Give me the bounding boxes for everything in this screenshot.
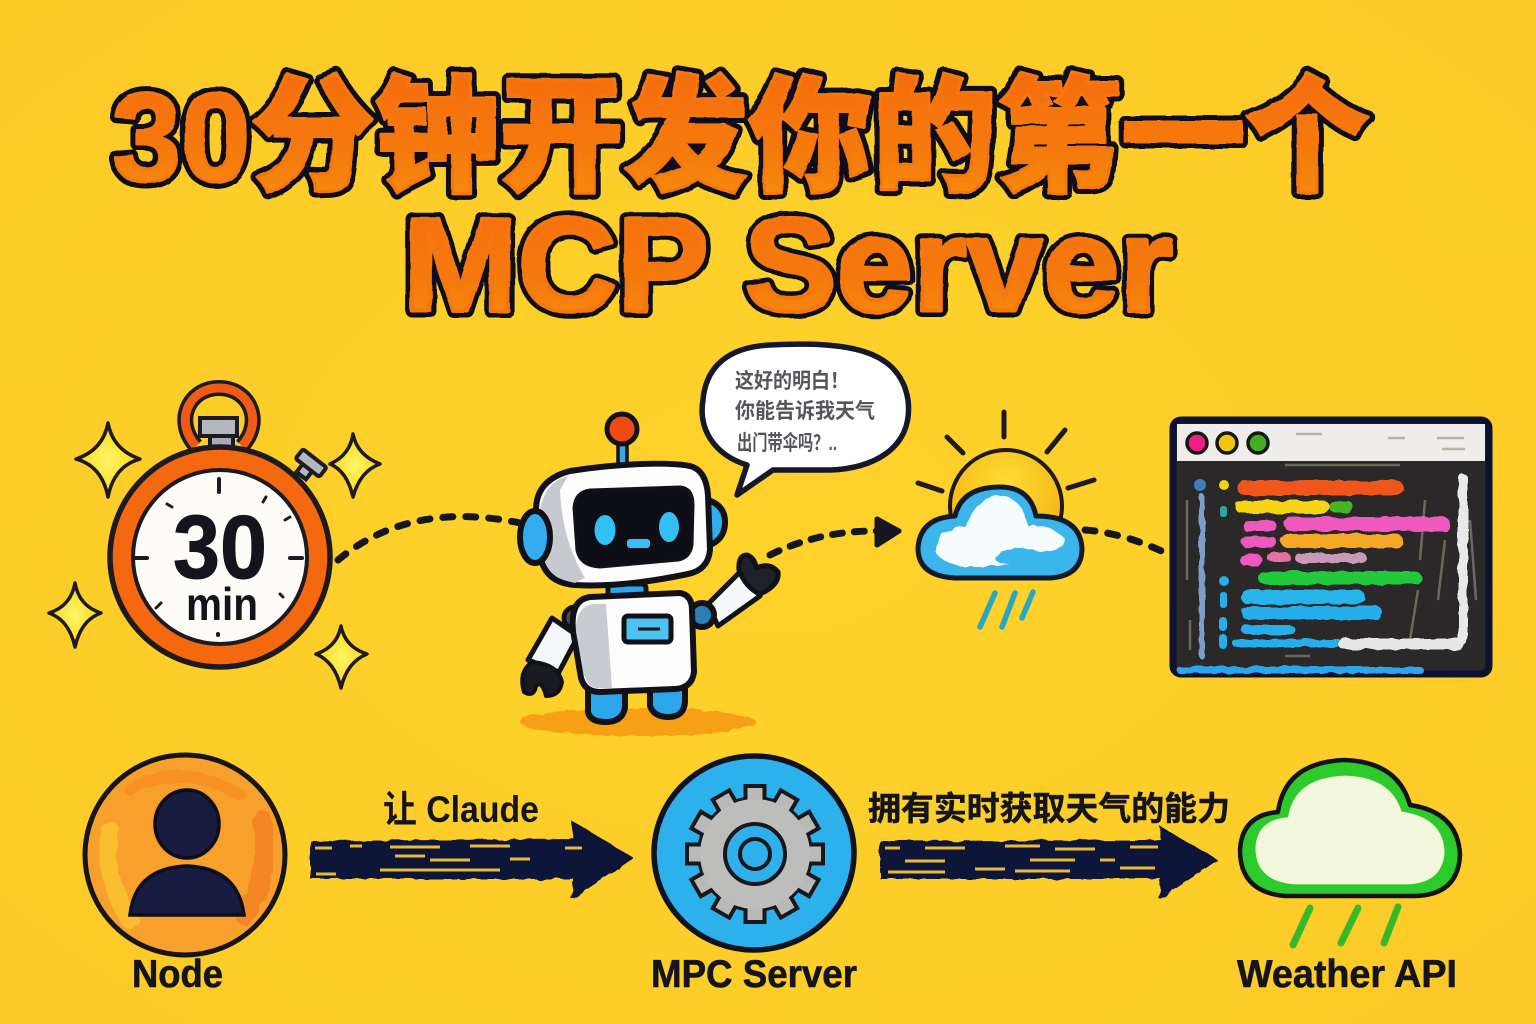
robot shadow	[520, 708, 756, 736]
node circle	[85, 755, 285, 996]
green rain	[1293, 907, 1398, 945]
robot antenna	[607, 414, 637, 466]
stopwatch unit: min	[186, 578, 258, 630]
chalk streaks	[1187, 465, 1476, 656]
node background	[85, 755, 285, 955]
robot right ear	[708, 500, 725, 546]
dashed arrow: robot to weather	[770, 519, 899, 555]
title bar	[1177, 424, 1485, 461]
api label: Weather API	[1237, 953, 1457, 996]
arrow 1	[311, 789, 632, 898]
mcp server circle	[651, 756, 857, 996]
code lines	[1180, 478, 1463, 670]
bubble text	[735, 370, 875, 455]
speech bubble	[702, 344, 909, 495]
arrow 2 streaks	[885, 846, 1158, 872]
title line 2: MCP Server	[403, 191, 1173, 340]
robot head	[536, 464, 710, 585]
robot neck	[608, 584, 646, 598]
arrow 2 shape	[881, 827, 1216, 898]
stopwatch number: 30	[173, 498, 267, 598]
cloud	[918, 487, 1082, 578]
stopwatch ticks	[135, 479, 302, 635]
title line 1: 30分钟开发你的第一个	[112, 67, 1370, 208]
stopwatch crown	[185, 388, 327, 485]
arrow 2	[868, 790, 1230, 898]
robot right arm	[690, 555, 778, 627]
robot left arm	[522, 607, 586, 696]
code window	[1173, 420, 1489, 674]
person icon	[130, 790, 244, 915]
server background	[654, 756, 854, 950]
dashed path: stopwatch to robot	[338, 517, 520, 560]
cloud highlight	[936, 496, 1066, 566]
title bar marks	[1296, 434, 1465, 449]
title	[112, 67, 1370, 340]
server label: MPC Server	[651, 953, 857, 996]
gear icon	[685, 784, 825, 924]
sparkles	[49, 423, 380, 688]
robot body	[573, 593, 694, 692]
bubble text: 出门带伞吗？..	[737, 431, 837, 455]
sun rays	[918, 412, 1094, 491]
dashed path: weather to code window	[1085, 530, 1170, 555]
stopwatch body	[110, 447, 330, 667]
weather icon	[918, 412, 1094, 627]
arrow 2 label: 拥有实时获取天气的能力	[868, 790, 1230, 827]
bubble shape	[702, 344, 909, 495]
window frame	[1173, 420, 1489, 674]
title line 2: MCP Server	[403, 191, 1173, 340]
node label: Node	[132, 953, 223, 996]
window buttons	[1187, 433, 1268, 453]
robot left ear	[520, 511, 550, 563]
bubble text: 这好的明白！	[735, 370, 849, 393]
cloud outline	[1240, 760, 1460, 896]
weather api cloud	[1237, 760, 1460, 996]
arrow 1 shape	[311, 822, 632, 898]
title line 1: 30分钟开发你的第一个	[112, 67, 1370, 208]
robot feet	[588, 682, 685, 722]
robot eyes and mouth	[594, 512, 679, 548]
rain	[980, 592, 1033, 627]
robot	[520, 414, 778, 736]
node crayon shading	[108, 776, 265, 920]
arrow 1 label: 让 Claude	[383, 789, 539, 830]
sun	[950, 450, 1062, 562]
arrow 1 streaks	[315, 846, 582, 874]
robot screen	[574, 487, 693, 567]
stopwatch	[110, 388, 330, 667]
bubble text: 你能告诉我天气	[735, 400, 875, 423]
stopwatch face	[133, 470, 307, 644]
cloud interior	[1255, 776, 1445, 884]
gutter marks	[1194, 479, 1229, 649]
